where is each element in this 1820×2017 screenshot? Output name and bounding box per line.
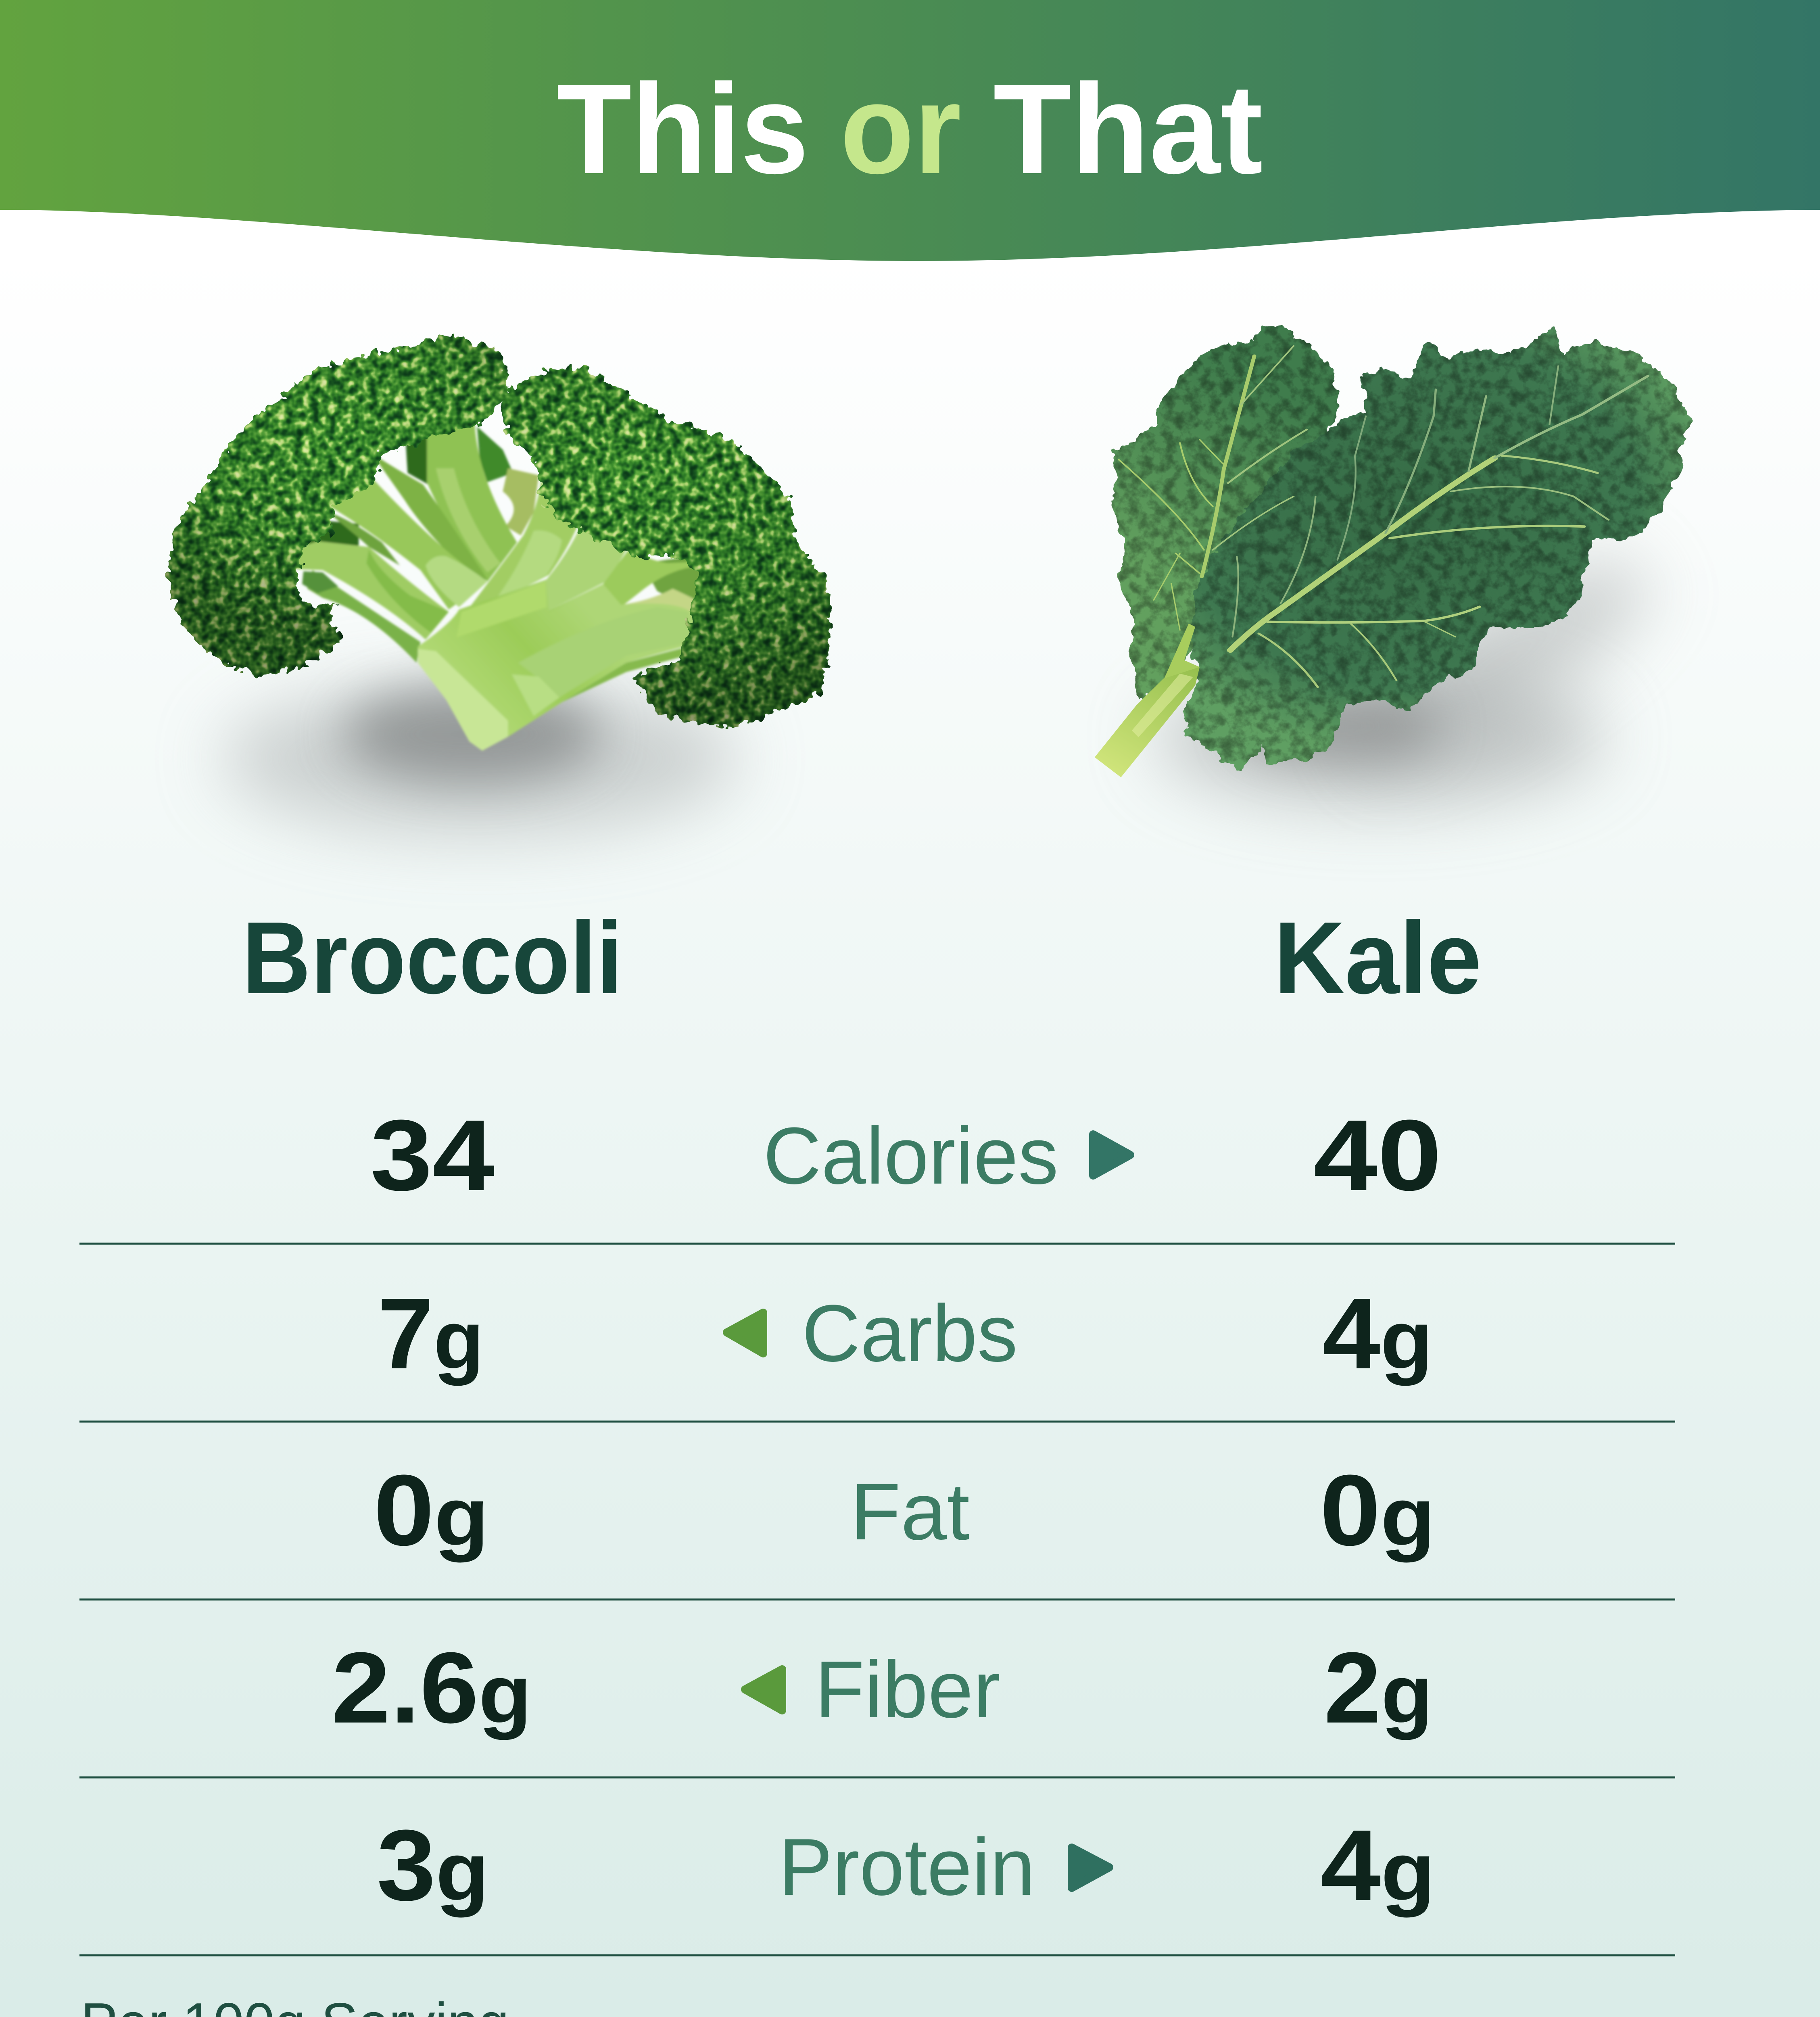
row: fiber xyxy=(332,1631,1433,1744)
column heading: Broccoli: Broccoli xyxy=(242,900,623,1015)
broccoli calories value: 34 xyxy=(370,1099,495,1211)
kale stem xyxy=(1095,624,1200,777)
row: fat xyxy=(374,1454,1435,1566)
carbs label: Carbs xyxy=(802,1288,1018,1378)
title xyxy=(557,58,1263,200)
title: That xyxy=(993,58,1263,200)
kale fat value: 0g xyxy=(1320,1454,1435,1566)
header banner xyxy=(0,0,1820,261)
broccoli protein value: 3g xyxy=(377,1809,489,1921)
kale veins, main lobe xyxy=(1230,366,1648,687)
title: or xyxy=(840,58,961,200)
broccoli carbs value: 7g xyxy=(378,1277,484,1390)
title: This xyxy=(557,58,809,200)
kale calories value: 40 xyxy=(1313,1099,1442,1211)
broccoli fat value: 0g xyxy=(374,1454,489,1566)
icon: broccoli xyxy=(167,334,830,835)
arrow: broccoli higher carbs xyxy=(727,1313,763,1353)
kale fiber value: 2g xyxy=(1324,1631,1433,1744)
kale protein value: 4g xyxy=(1321,1809,1435,1921)
icon: kale leaf xyxy=(1095,325,1692,807)
arrow: broccoli higher fiber xyxy=(745,1669,782,1710)
row: carbs xyxy=(378,1277,1433,1390)
column heading: Kale: Kale xyxy=(1274,900,1482,1015)
arrow: kale higher protein xyxy=(1072,1848,1109,1888)
row: calories xyxy=(370,1099,1442,1211)
calories label: Calories xyxy=(763,1111,1058,1201)
fiber label: Fiber xyxy=(815,1645,1000,1735)
fat label: Fat xyxy=(850,1467,970,1557)
broccoli fiber value: 2.6g xyxy=(332,1631,532,1744)
arrow: kale higher calories xyxy=(1093,1134,1130,1176)
row: protein xyxy=(377,1809,1435,1921)
protein label: Protein xyxy=(779,1822,1035,1912)
kale veins, left lobe xyxy=(1119,346,1307,630)
kale carbs value: 4g xyxy=(1322,1277,1433,1390)
